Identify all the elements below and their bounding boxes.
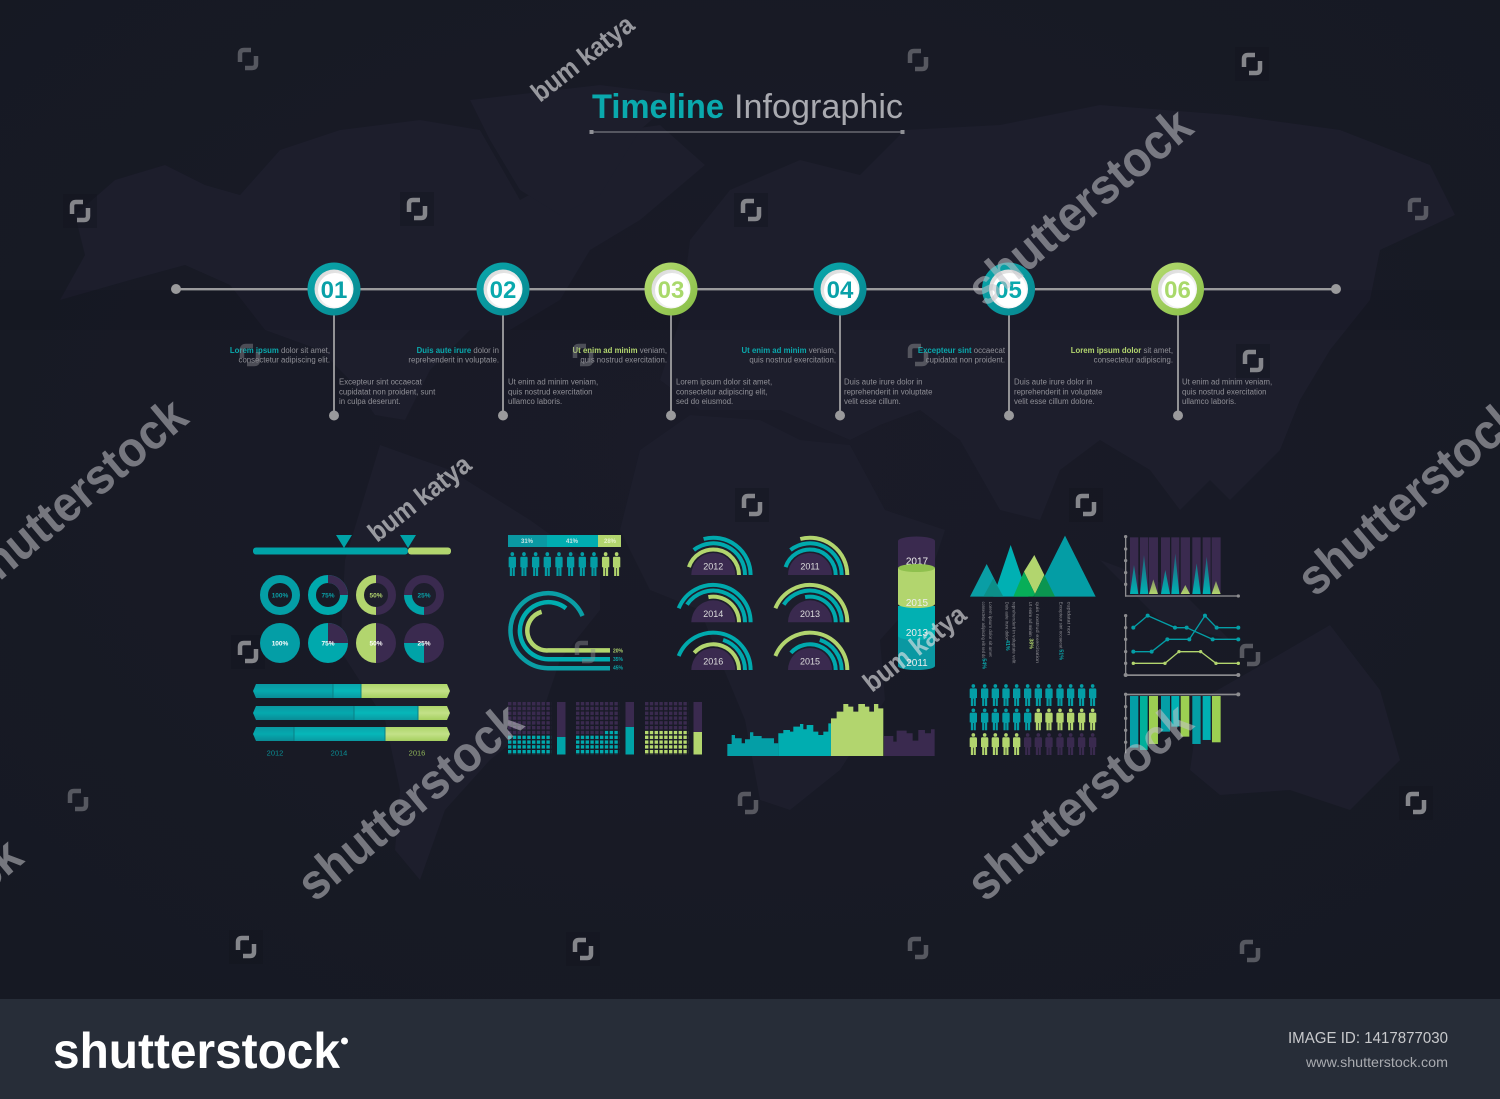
timeline milestone 04: 04 bbox=[827, 277, 854, 304]
timeline milestone 04: Ut enim ad minim veniam, bbox=[742, 346, 836, 355]
spike column chart bbox=[1124, 535, 1240, 598]
donut and pie percentage charts: 25% bbox=[417, 640, 431, 648]
donut and pie percentage charts bbox=[260, 575, 444, 663]
timeline milestone 02: ullamco laboris. bbox=[508, 397, 562, 406]
map shadow band bbox=[0, 290, 1500, 330]
timeline milestone 03: consectetur adipiscing elit, bbox=[676, 388, 767, 396]
line chart bbox=[1124, 614, 1240, 677]
title bbox=[592, 88, 903, 126]
stepped area chart bbox=[727, 704, 935, 756]
watermark text: bum katya: bum katya bbox=[362, 448, 478, 548]
concentric progress curves bbox=[511, 593, 624, 672]
world map silhouette bbox=[60, 85, 1455, 880]
radial gauge 2016: 2016 bbox=[703, 656, 723, 666]
timeline milestone 01: Excepteur sint occaecat bbox=[339, 378, 423, 386]
stacked percentage bar: 28% bbox=[604, 539, 617, 545]
overlapping triangle chart: 41% bbox=[1004, 640, 1010, 651]
dot matrix chart 1 bbox=[508, 702, 566, 755]
radial gauge 2012 bbox=[689, 538, 751, 575]
watermark text: bum katya: bum katya bbox=[857, 598, 973, 698]
timeline milestone 02: Ut enim ad minim veniam, bbox=[508, 378, 598, 386]
timeline milestone 01 bbox=[230, 262, 436, 420]
timeline milestone 04: quis nostrud exercitation. bbox=[749, 356, 836, 364]
timeline milestone 05 bbox=[918, 262, 1102, 420]
timeline milestone 03: Lorem ipsum dolor sit amet, bbox=[676, 378, 772, 386]
watermark text: shutterstock: shutterstock bbox=[956, 692, 1203, 911]
horizontal segmented bars: 2014 bbox=[331, 748, 347, 758]
overlapping triangle chart: 51% bbox=[1058, 649, 1064, 660]
timeline milestone 03: sed do eiusmod. bbox=[676, 397, 733, 406]
horizontal segmented bars: 2016 bbox=[409, 748, 425, 758]
footer image id bbox=[1288, 1030, 1448, 1070]
timeline milestone 06: 06 bbox=[1164, 277, 1191, 304]
stacked percentage bar: 41% bbox=[566, 539, 579, 545]
radial gauge 2013 bbox=[775, 585, 847, 622]
radial gauge 2015 bbox=[775, 633, 847, 670]
radial gauge 2011 bbox=[786, 538, 847, 575]
stacked percentage bar bbox=[508, 535, 621, 547]
title: Timeline bbox=[592, 88, 724, 126]
progress slider with markers bbox=[253, 535, 451, 554]
overlapping triangle chart: Duis aute irure dolor bbox=[1004, 602, 1010, 640]
timeline milestone 02: quis nostrud exercitation bbox=[508, 388, 593, 396]
timeline milestone 05: velit esse cillum dolore. bbox=[1014, 397, 1095, 406]
footer logo: shutterstock bbox=[53, 1023, 340, 1079]
watermark text: shutterstock: shutterstock bbox=[286, 692, 533, 911]
overlapping triangle chart: Ut enim ad minim bbox=[1027, 602, 1033, 637]
timeline milestone 06: Ut enim ad minim veniam, bbox=[1182, 378, 1272, 386]
timeline milestone 03 bbox=[573, 262, 772, 420]
timeline milestone 05: 05 bbox=[995, 277, 1022, 304]
overlapping triangle chart: cupidatat non bbox=[1065, 602, 1071, 635]
footer bar bbox=[0, 999, 1500, 1099]
radial gauge 2012: 2012 bbox=[703, 562, 723, 572]
people pictogram grid bbox=[970, 684, 1096, 755]
timeline milestone 03: quis nostrud exercitation. bbox=[580, 356, 667, 364]
timeline milestone 02: Duis aute irure dolor in bbox=[417, 346, 499, 355]
donut and pie percentage charts: 75% bbox=[321, 640, 335, 648]
overlapping triangle chart: Excepteur sint occaecat bbox=[1058, 602, 1064, 649]
radial gauge 2015: 2015 bbox=[800, 656, 820, 666]
overlapping triangle chart: reprehenderit in voluptate velit bbox=[1011, 602, 1017, 664]
donut and pie percentage charts: 50% bbox=[369, 592, 383, 600]
watermark icon backing squares bbox=[63, 47, 1433, 966]
stacked cylinder chart: 2015 bbox=[906, 598, 929, 609]
overlapping triangle chart: quis nostrud exercitation bbox=[1034, 602, 1040, 664]
stacked cylinder chart: 2013 bbox=[906, 628, 929, 639]
timeline milestone 06: consectetur adipiscing. bbox=[1094, 356, 1173, 364]
stacked percentage bar: 31% bbox=[521, 539, 534, 545]
donut and pie percentage charts: 100% bbox=[272, 592, 289, 600]
overlapping triangle chart: Lorem ipsum dolor sit amet bbox=[987, 602, 993, 657]
horizontal segmented bars bbox=[253, 684, 450, 758]
timeline milestone 06: quis nostrud exercitation bbox=[1182, 388, 1267, 396]
timeline milestone 06: ullamco laboris. bbox=[1182, 397, 1236, 406]
donut and pie percentage charts: 25% bbox=[417, 592, 431, 600]
timeline milestone 02 bbox=[408, 262, 598, 420]
concentric progress curves: 45% bbox=[613, 666, 624, 672]
stacked cylinder chart: 2011 bbox=[906, 658, 928, 669]
horizontal segmented bars: 2012 bbox=[267, 748, 283, 758]
overlapping triangle chart: 54% bbox=[980, 658, 986, 669]
overlapping triangle chart bbox=[970, 536, 1096, 669]
concentric progress curves: 35% bbox=[613, 657, 624, 663]
timeline milestone 05: Excepteur sint occaecat bbox=[918, 346, 1006, 355]
donut and pie percentage charts: 75% bbox=[321, 592, 335, 600]
timeline milestone 04 bbox=[742, 262, 932, 420]
donut and pie percentage charts: 100% bbox=[272, 640, 289, 648]
title underline bbox=[590, 130, 904, 134]
timeline milestone 04: Duis aute irure dolor in bbox=[844, 378, 922, 386]
radial gauge 2014: 2014 bbox=[703, 609, 723, 619]
timeline milestone 01: in culpa deserunt. bbox=[339, 397, 401, 406]
timeline milestone 05: reprehenderit in voluptate bbox=[1014, 388, 1102, 396]
watermark text: shutterstock: shutterstock bbox=[956, 97, 1203, 316]
timeline milestone 05: cupidatat non proident. bbox=[926, 356, 1005, 364]
people icon row bbox=[509, 552, 620, 576]
radial gauge 2011: 2011 bbox=[800, 562, 820, 572]
timeline milestone 02: 02 bbox=[490, 277, 516, 304]
timeline milestone 03: 03 bbox=[658, 277, 684, 304]
timeline milestone 01: Lorem ipsum dolor sit amet, bbox=[230, 346, 330, 355]
timeline milestone 06 bbox=[1071, 262, 1272, 420]
stacked cylinder chart: 2017 bbox=[906, 556, 929, 568]
hanging bar chart bbox=[1124, 692, 1240, 753]
title: Infographic bbox=[734, 88, 903, 126]
radial gauge 2014 bbox=[679, 585, 751, 622]
timeline milestone 05: Duis aute irure dolor in bbox=[1014, 378, 1092, 386]
overlapping triangle chart: consectetur adipiscing elit sed do bbox=[980, 602, 986, 658]
radial gauge 2013: 2013 bbox=[800, 609, 820, 619]
footer image id: IMAGE ID: 1417877030 bbox=[1288, 1030, 1448, 1047]
watermark icons bbox=[70, 50, 1426, 960]
timeline milestone 01: 01 bbox=[321, 277, 347, 304]
overlapping triangle chart: 38% bbox=[1027, 638, 1033, 649]
timeline milestone 04: velit esse cillum. bbox=[844, 397, 901, 406]
footer image id: www.shutterstock.com bbox=[1305, 1054, 1448, 1070]
watermark text: bum katya: bum katya bbox=[525, 8, 641, 108]
donut and pie percentage charts: 50% bbox=[369, 640, 383, 648]
radial gauge 2016 bbox=[679, 633, 751, 670]
timeline milestone 02: reprehenderit in voluptate. bbox=[408, 356, 499, 364]
timeline milestone 01: cupidatat non proident, sunt bbox=[339, 388, 436, 396]
timeline milestone 03: Ut enim ad minim veniam, bbox=[573, 346, 667, 355]
dot matrix chart 2 bbox=[576, 702, 634, 755]
stacked cylinder chart bbox=[898, 536, 935, 670]
timeline axis bbox=[171, 284, 1341, 294]
dot matrix chart 3 bbox=[645, 702, 702, 755]
watermark text: bum katya bbox=[362, 8, 973, 698]
timeline milestone 06: Lorem ipsum dolor sit amet, bbox=[1071, 346, 1173, 355]
timeline milestone 01: consectetur adipiscing elit. bbox=[239, 356, 330, 364]
timeline milestone 04: reprehenderit in voluptate bbox=[844, 388, 932, 396]
concentric progress curves: 20% bbox=[613, 648, 624, 654]
